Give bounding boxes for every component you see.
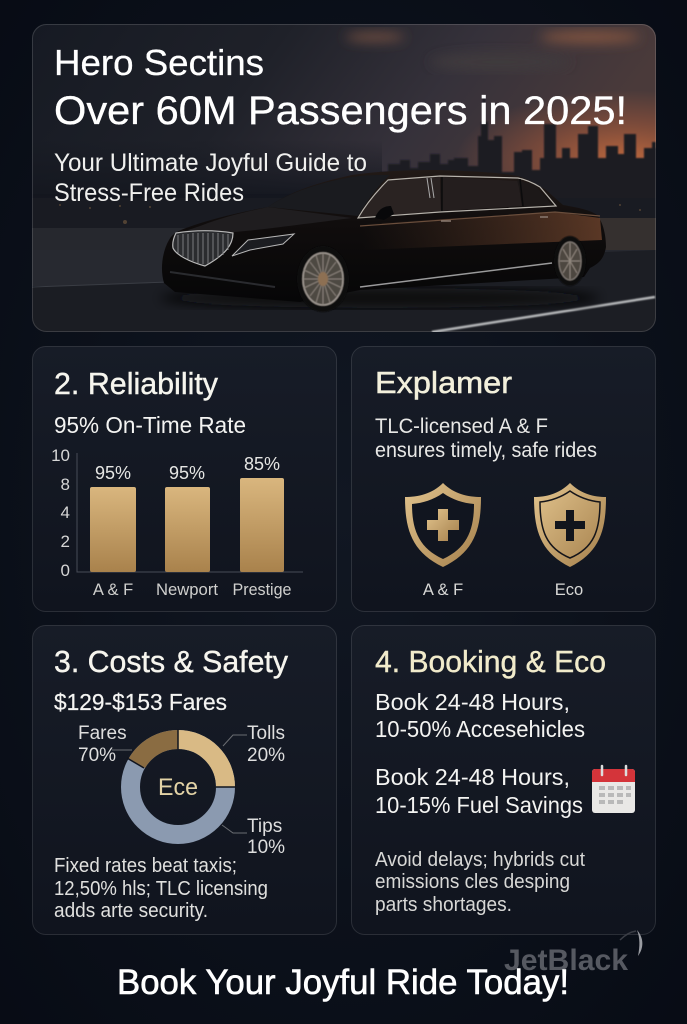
bar chart: 8 <box>61 475 70 494</box>
front wheel <box>301 251 346 312</box>
grille <box>173 231 233 266</box>
hero subtitle <box>54 149 367 207</box>
panel: reliability <box>32 346 336 612</box>
bar chart: A & F <box>93 581 133 599</box>
donut chart: 70% <box>78 745 116 766</box>
bar chart: 4 <box>61 503 70 522</box>
icon: filled shield <box>534 483 606 567</box>
eco text: emissions cles desping <box>375 871 570 893</box>
donut chart: Fares <box>78 723 127 744</box>
booking text two: Book 24-48 Hours, <box>375 764 570 790</box>
donut chart: Tolls <box>247 723 285 744</box>
heading: reliability: 2. Reliability <box>54 366 218 401</box>
donut chart: Ece <box>158 774 198 801</box>
eco text: Avoid delays; hybrids cut <box>375 849 585 871</box>
bar chart: 95% <box>95 463 131 483</box>
subheading: fares: $129-$153 Fares <box>54 689 227 715</box>
eco text: parts shortages. <box>375 894 512 916</box>
booking text one: 10-50% Accesehicles <box>375 716 585 742</box>
bar chart: Prestige <box>232 581 292 599</box>
subheading: on-time rate: 95% On-Time Rate <box>54 412 246 438</box>
donut chart <box>78 723 285 858</box>
shield labels: A & F <box>423 581 463 599</box>
panel: hero <box>32 24 687 332</box>
bar chart: 2 <box>61 532 70 551</box>
hero subtitle: Your Ultimate Joyful Guide to <box>54 149 367 177</box>
bar chart: 95% <box>169 463 205 483</box>
panel: costs and safety <box>32 626 336 934</box>
donut chart: Tips <box>247 816 282 837</box>
costs text: adds arte security. <box>54 900 208 922</box>
explainer text: ensures timely, safe rides <box>375 439 597 462</box>
heading: explainer: Explamer <box>375 365 512 400</box>
costs text <box>54 855 268 922</box>
logo: JetBlack <box>504 930 642 977</box>
icon: outlined shield <box>405 483 481 567</box>
booking text two: 10-15% Fuel Savings <box>375 792 583 818</box>
explainer text: TLC-licensed A & F <box>375 415 548 438</box>
explainer text <box>375 415 597 462</box>
bar chart: 85% <box>244 454 280 474</box>
logo: JetBlack: JetBlack <box>504 944 628 977</box>
panel: explainer <box>352 346 656 612</box>
hero heading: Hero Sectins <box>54 42 264 83</box>
costs text: 12,50% hls; TLC licensing <box>54 878 268 900</box>
booking text two <box>375 764 583 818</box>
heading: booking: 4. Booking & Eco <box>375 644 606 679</box>
heading: costs: 3. Costs & Safety <box>54 644 288 679</box>
booking text one <box>375 689 585 742</box>
bar chart <box>51 446 303 599</box>
bar chart: 10 <box>51 446 70 465</box>
donut chart: 20% <box>247 745 285 766</box>
bar chart: Newport <box>156 581 218 599</box>
hero photo: sky, skyline and road <box>32 24 687 332</box>
icon: calendar <box>592 766 635 813</box>
bar chart: 0 <box>61 561 70 580</box>
panel: booking and eco <box>352 626 656 934</box>
rear wheel <box>558 236 582 286</box>
costs text: Fixed rates beat taxis; <box>54 855 237 877</box>
limousine <box>160 170 606 312</box>
booking text one: Book 24-48 Hours, <box>375 689 570 715</box>
shield labels <box>423 581 583 599</box>
hero subtitle: Stress-Free Rides <box>54 179 244 207</box>
donut chart: 10% <box>247 837 285 858</box>
hero headline: Over 60M Passengers in 2025! <box>54 89 627 133</box>
eco text <box>375 849 585 916</box>
shield labels: Eco <box>555 581 583 599</box>
headlight <box>232 234 294 256</box>
call to action: Book Your Joyful Ride Today! <box>117 963 569 1002</box>
